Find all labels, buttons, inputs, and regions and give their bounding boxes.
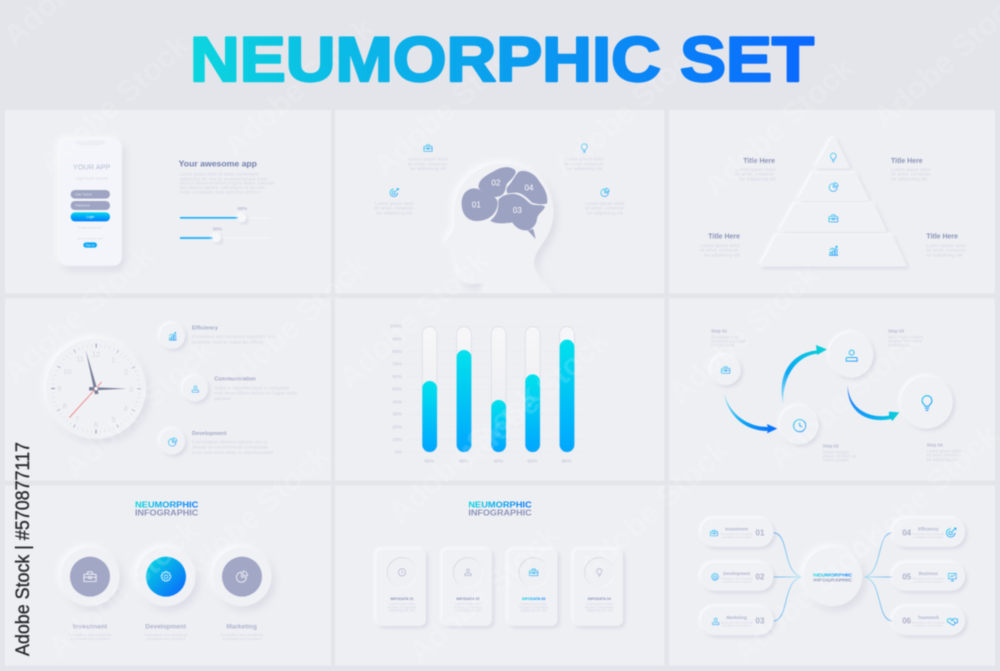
callout: right: sit amet, consecte- [585, 206, 626, 212]
watermark: Adobe Stock [546, 32, 711, 185]
item: communication: pariatur [214, 396, 232, 402]
y axis and grid: 50% [392, 387, 403, 393]
phone mockup: Not a member yet? [78, 236, 103, 240]
item: development: Exercitation ullamco laboris nisi ut [192, 440, 268, 446]
bar 80% [457, 327, 471, 464]
heading: NEUMORPHIC [135, 500, 199, 509]
callout: left: sit amet, consecte- [374, 206, 415, 212]
card 01: sit amet, consectetur [387, 605, 417, 609]
y axis and grid: 70% [392, 361, 403, 367]
pill 03: Excepteur sint occaecat [721, 620, 753, 624]
clock: 7 [75, 415, 79, 424]
pill 03: Marketing [726, 615, 747, 620]
text: upper right: tur adipiscing elit [891, 176, 928, 182]
clock: 3 [129, 385, 133, 394]
pill 05: Business [919, 571, 939, 576]
y axis and grid: 40% [392, 399, 403, 405]
pill 05 [892, 563, 965, 591]
text: lower right [926, 234, 967, 258]
item: development: Duis aute irure dolor in reprehenderit [192, 450, 274, 456]
heading [135, 500, 199, 518]
text: upper right: Title Here [891, 158, 923, 165]
watermark: Adobe Stock [331, 242, 496, 395]
head silhouette [446, 163, 555, 295]
text: lower right: sit amet, consecte- [926, 248, 967, 254]
connectors right [864, 533, 892, 621]
step 01: Step 01 [711, 328, 727, 333]
card 01: adipiscing elit, sed [389, 609, 415, 613]
item: marketing: Marketing [226, 624, 257, 631]
callout: right: Lorem ipsum dolor [585, 201, 625, 207]
pill 04 [892, 518, 965, 547]
panel: four cards [335, 485, 664, 666]
callout: top left [408, 145, 449, 172]
panel: mobile app [5, 110, 331, 293]
card 04: adipiscing elit, sed [586, 609, 612, 613]
callout: left [374, 189, 415, 216]
center circle: INFOGRAPHIC [813, 578, 853, 583]
clock: 9 [57, 384, 61, 393]
callout: top right: sit amet, consecte- [564, 161, 605, 167]
brain lobe 04: 04 [525, 183, 534, 192]
description text: tion ullamco laboris. Sed aliquis ex ea com- [180, 185, 266, 190]
text: upper left: Title Here [743, 158, 775, 165]
item: efficiency: Efficiency [192, 325, 219, 331]
item: efficiency: Excepteur sint occaecat cupidatat non [192, 334, 276, 340]
bar 55% [422, 327, 437, 464]
callout: top right [564, 144, 605, 172]
pill 02: Development [723, 571, 751, 576]
pill 02 [701, 563, 773, 591]
pill 02: 02 [756, 573, 765, 582]
item: marketing: cupidatat non proident [222, 636, 262, 641]
pill 05: 05 [902, 573, 912, 582]
watermark: Adobe Stock [381, 377, 546, 530]
pill 02: cupidatat non proident [722, 579, 752, 583]
item: development: Development [145, 624, 187, 631]
step 02 [780, 406, 857, 463]
y axis and grid: 10% [392, 437, 403, 443]
step 04: Lorem ipsum dolor [927, 448, 962, 453]
step 01: non proident. [711, 342, 735, 347]
text: upper left: Lorem ipsum dolor [736, 167, 776, 173]
bar 88% [560, 327, 574, 464]
y axis and grid: 0% [395, 450, 403, 456]
text: lower left [699, 234, 741, 258]
y axis and grid [390, 324, 588, 456]
watermark: Adobe Stock [366, 30, 531, 183]
watermark: Adobe Stock [401, 517, 566, 670]
watermark: Adobe Stock [171, 437, 336, 590]
step 04: sit amet, consecte- [927, 453, 962, 458]
pill 05: Excepteur sint occaecat [912, 576, 944, 580]
phone mockup: YOUR APP [73, 162, 111, 171]
arrow: step 2 to 3 [782, 345, 827, 405]
bar 55%: 55% [424, 458, 435, 464]
brain lobe 01: 01 [472, 201, 481, 210]
y axis and grid: 30% [392, 412, 403, 418]
slider 30%: 30% [213, 226, 222, 231]
watermark: Adobe Stock [761, 322, 926, 475]
card 02: adipiscing elit, sed [455, 609, 481, 613]
item: communication: velit esse cillum dolore eu fugiat nulla [214, 391, 297, 397]
clock: 8 [63, 402, 67, 411]
text: upper left: sit amet, consecte- [735, 172, 776, 178]
step 02: minim veniam. [823, 458, 849, 463]
phone mockup: User Name [75, 193, 92, 197]
callout: top left: sit amet, consecte- [408, 161, 449, 167]
card 01: INFODATA 01 [390, 597, 414, 601]
slider 30% [180, 226, 270, 242]
clock: 4 [124, 404, 128, 413]
text: lower right: Title Here [926, 234, 958, 241]
callout: right: tur adipiscing elit [587, 210, 624, 216]
pill 01: Investment [725, 527, 749, 532]
step 03: scelerisque. [888, 342, 910, 347]
item: marketing [213, 547, 271, 641]
vertical stock credit: Adobe Stock | #570877117 [13, 442, 34, 656]
card 02: INFODATA 02 [456, 597, 480, 601]
brain [462, 167, 547, 239]
card 04 [574, 549, 623, 626]
step 01: occaecat cupidatat [711, 338, 747, 343]
clock: 11 [76, 354, 84, 363]
watermark: Adobe Stock [0, 237, 161, 390]
text: lower left: sit amet, consecte- [699, 248, 740, 254]
card 03: Lorem ipsum dolor [521, 602, 547, 606]
item: investment [61, 547, 119, 641]
item: development: Excepteur sint occaecat [145, 632, 188, 637]
item: development: cupidatat non proident [146, 636, 186, 641]
pill 01: cupidatat non proident [722, 535, 752, 539]
pyramid tier 2 [798, 173, 868, 200]
description text [180, 172, 276, 195]
phone mockup: Login [86, 215, 95, 219]
panel: mind map [669, 485, 995, 666]
phone mockup: Forgot password? [78, 225, 103, 229]
panel: bar chart [335, 298, 664, 481]
watermark: Adobe Stock [216, 10, 381, 163]
step 03 [829, 328, 923, 377]
connectors left [773, 533, 802, 621]
slider 68% [180, 206, 270, 222]
card 03 [508, 549, 557, 626]
card 01 [377, 549, 426, 626]
pill 04: 04 [902, 528, 912, 537]
clock [46, 339, 146, 439]
text: lower left: tur adipiscing elit [704, 252, 741, 258]
text: lower left: Title Here [708, 234, 740, 241]
heading: INFOGRAPHIC [135, 509, 199, 518]
phone mockup: Password [75, 204, 90, 208]
pill 06: 06 [902, 617, 912, 626]
card 02 [442, 549, 492, 626]
callout: top right: Lorem ipsum dolor [564, 157, 605, 163]
pill 01: Excepteur sint occaecat [721, 532, 753, 536]
card 03: sit amet, consectetur [519, 605, 548, 609]
clock: 6 [94, 420, 98, 429]
clock: 10 [63, 367, 71, 376]
phone mockup: Sign up [85, 243, 95, 247]
pyramid tier 4 [761, 236, 906, 266]
bar 40%: 40% [493, 458, 504, 464]
step 02: Dolore magna [823, 450, 849, 455]
brain stem [528, 229, 536, 239]
card 02: sit amet, consectetur [453, 605, 483, 609]
y axis and grid: 100% [390, 324, 403, 330]
pill 04: cupidatat non proident [914, 535, 943, 539]
heading: NEUMORPHIC [468, 500, 532, 509]
item: efficiency: proident, sunt in culpa qui officia [192, 340, 263, 346]
clock: 1 [111, 356, 115, 365]
pill 03: cupidatat non proident [722, 623, 752, 627]
pill 01 [701, 518, 773, 547]
item: investment: Excepteur sint occaecat [69, 632, 112, 637]
step 04: Step 04 [927, 443, 943, 448]
step 01: Excepteur sint [711, 334, 738, 339]
callout: top left: Lorem ipsum dolor [408, 157, 448, 163]
pyramid tier 3 [780, 204, 886, 231]
step 03: Sed fringilla mauris [888, 334, 923, 339]
description text: modo consequat. Duis aute irure dolor in [180, 190, 261, 195]
clock: 2 [124, 368, 128, 377]
watermark: Adobe Stock [56, 332, 221, 485]
callout: top left: tur adipiscing elit [410, 166, 447, 172]
panel: pyramid [669, 110, 995, 293]
text: lower right: Lorem ipsum dolor [926, 243, 967, 249]
heading: your awesome app: Your awesome app [179, 159, 257, 168]
text: lower right: tur adipiscing elit [926, 252, 963, 258]
bar 60% [525, 327, 540, 464]
step 02: aliqua. Ut enim ad [823, 454, 857, 459]
text: upper right: sit amet, consecte- [891, 172, 932, 178]
brain lobe 03: 03 [513, 206, 522, 215]
pill 03: 03 [756, 617, 765, 626]
item: efficiency [160, 323, 276, 349]
item: marketing: Excepteur sint occaecat [221, 632, 264, 637]
center circle: NEUMORPHIC [813, 573, 853, 578]
card 03: INFODATA 03 [522, 597, 545, 601]
card 01: Lorem ipsum dolor [389, 602, 415, 606]
step 03: Step 03 [888, 328, 904, 333]
watermark: Adobe Stock [661, 257, 826, 410]
center circle [803, 547, 862, 606]
text: upper right [891, 158, 932, 182]
watermark: Adobe Stock [696, 50, 861, 203]
pill 04: Excepteur sint occaecat [912, 532, 944, 536]
item: communication: Dolor in reprehenderit in voluptate [214, 386, 290, 392]
panel: process steps [669, 298, 995, 481]
description text: adipiscing elit, sed do eiusmod tempor incid- [180, 176, 268, 181]
description text: Lorem ipsum dolor sit amet, consectetur [180, 172, 260, 177]
panel: head and brain [335, 110, 664, 295]
item: investment: cupidatat non proident [70, 636, 111, 641]
clock: 5 [112, 415, 116, 424]
pill 06: Teamwork [918, 615, 939, 620]
bar 40% [491, 327, 506, 464]
callout: right [585, 188, 626, 216]
pill 05: cupidatat non proident [914, 579, 943, 583]
phone mockup: Login to your account [76, 177, 108, 181]
heading [468, 500, 532, 518]
y axis and grid: 80% [392, 349, 403, 355]
step 01 [711, 328, 747, 385]
panel: clock [5, 298, 331, 481]
item: development [137, 547, 195, 641]
item: development [160, 429, 274, 456]
clock: 12 [92, 350, 100, 359]
pyramid tier 1 [816, 138, 849, 168]
bar 88%: 88% [562, 458, 572, 464]
watermark: Adobe Stock [31, 27, 196, 180]
pill 04: Efficiency [918, 527, 939, 532]
pill 06: Excepteur sint occaecat [912, 620, 944, 624]
card 04: INFODATA 04 [588, 597, 612, 601]
phone mockup [59, 140, 122, 266]
item: communication: Communication [214, 377, 256, 383]
card 04: sit amet, consectetur [585, 605, 614, 609]
bar 60%: 60% [527, 458, 538, 464]
item: development: aliquip ex ea commodo consequat. [192, 445, 269, 451]
arrow: step 1 to 2 [724, 392, 777, 433]
y axis and grid: 20% [392, 424, 403, 430]
step 03: sit amet nibh tortor [888, 338, 923, 343]
step 04: tur adipiscing elit [927, 457, 958, 462]
card 04: Lorem ipsum dolor [586, 602, 612, 606]
brain lobe 02: 02 [492, 178, 501, 187]
watermark: Adobe Stock [211, 247, 376, 400]
pill 06: cupidatat non proident [914, 623, 943, 627]
arrow: step 3 to 4 [848, 386, 899, 421]
pill 03 [701, 607, 773, 635]
text: upper left [735, 158, 776, 182]
y axis and grid: 90% [392, 336, 403, 342]
watermark: Adobe Stock [41, 512, 206, 665]
description text: idunt ut labore et dolore magna aliqua. Exercita- [180, 181, 276, 186]
pill 02: Excepteur sint occaecat [721, 576, 753, 580]
item: development: Development [192, 431, 227, 437]
card 03: adipiscing elit, sed [521, 609, 547, 613]
bar 80%: 80% [459, 458, 469, 464]
y axis and grid: 60% [392, 374, 403, 380]
heading: INFOGRAPHIC [468, 509, 532, 518]
step 04 [901, 376, 962, 462]
text: upper right: Lorem ipsum dolor [891, 167, 931, 173]
panel: three circles [5, 485, 331, 666]
step 02: Step 02 [823, 444, 839, 449]
item: communication [183, 376, 297, 402]
callout: left: Lorem ipsum dolor [375, 201, 415, 207]
pill 01: 01 [756, 528, 765, 537]
pill 06 [892, 607, 965, 635]
slider 68%: 68% [238, 206, 247, 211]
card 02: Lorem ipsum dolor [455, 602, 481, 606]
callout: top right: tur adipiscing elit [566, 166, 603, 172]
text: lower left: Lorem ipsum dolor [700, 243, 740, 249]
watermark: Adobe Stock [451, 322, 616, 475]
watermark: Adobe Stock [571, 432, 736, 585]
title: NEUMORPHIC SET [190, 25, 814, 95]
callout: left: tur adipiscing elit [377, 210, 413, 216]
text: upper left: tur adipiscing elit [740, 176, 776, 182]
watermark: Adobe Stock [726, 517, 891, 670]
item: investment: Investment [73, 624, 108, 631]
